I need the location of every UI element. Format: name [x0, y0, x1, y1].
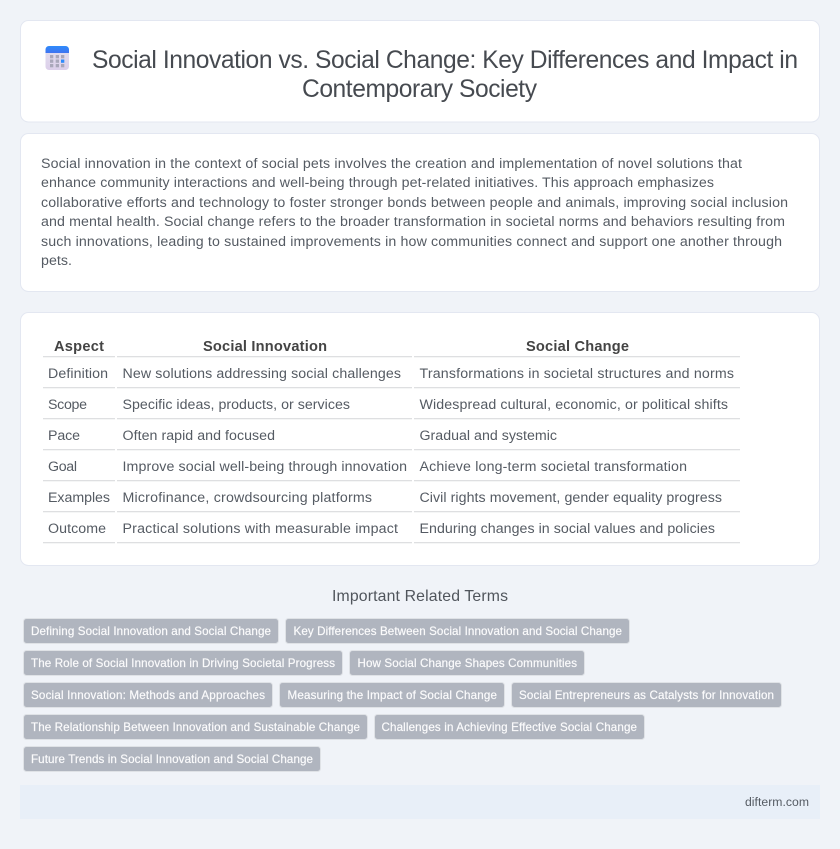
tag: measuring the impact: Measuring the Impact of Social Change: [288, 689, 497, 702]
table row: scope: Widespread cultural, economic, or political shifts: [420, 397, 728, 413]
tag: methods and approaches: Social Innovation: Methods and Approaches: [31, 689, 265, 702]
title: [92, 47, 798, 103]
table row: outcome: Outcome: [48, 521, 106, 537]
table row: definition: [48, 366, 734, 382]
table header row: [54, 339, 629, 355]
table header row: Aspect: [54, 339, 104, 355]
table row: goal: Achieve long-term societal transformation: [420, 459, 687, 475]
tag: role of social innovation: [24, 650, 342, 676]
table row: examples: Civil rights movement, gender equality progress: [420, 490, 722, 506]
table row: outcome: Enduring changes in social values and policies: [420, 521, 715, 537]
table row: pace: Pace: [48, 428, 80, 444]
table row: goal: Improve social well-being through innovation: [122, 459, 407, 475]
table row: scope: Scope: [48, 397, 87, 413]
heading: important related terms: Important Related Terms: [332, 588, 508, 605]
table row: outcome: [48, 521, 715, 537]
table row: pace: [48, 428, 557, 444]
tag: how social change shapes communities: [350, 650, 584, 676]
footer: site name: difterm.com: [745, 795, 809, 809]
text block: introduction paragraph: and mental health. Social change refers to the broader transformation in societal norms and behaviors resulting from: [41, 214, 785, 230]
footer: [20, 785, 820, 819]
table row: pace: Gradual and systemic: [420, 428, 557, 444]
table row: examples: [48, 490, 722, 506]
table header row: Social Innovation: [203, 339, 327, 355]
tag: how social change shapes communities: How Social Change Shapes Communities: [358, 657, 577, 670]
text block: introduction paragraph: collaborative efforts and technology to foster stronger bonds between people and animals, improving social inclusion: [41, 195, 788, 211]
table row: goal: Goal: [48, 459, 77, 475]
panel: introduction: [20, 134, 820, 292]
table row: outcome: Practical solutions with measurable impact: [122, 521, 398, 537]
table header row: Social Change: [526, 339, 629, 355]
tag: methods and approaches: [24, 682, 272, 708]
title: Contemporary Society: [302, 76, 538, 103]
tag: future trends: [24, 746, 320, 772]
tag: challenges: [374, 714, 644, 740]
table row: definition: New solutions addressing social challenges: [122, 366, 401, 382]
tag: role of social innovation: The Role of Social Innovation in Driving Societal Progress: [31, 657, 335, 670]
tag: challenges: Challenges in Achieving Effective Social Change: [382, 721, 637, 734]
table row: definition: Definition: [48, 366, 108, 382]
table row: goal: [48, 459, 687, 475]
panel: header: [20, 20, 820, 122]
table row: pace: Often rapid and focused: [122, 428, 275, 444]
table row: definition: Transformations in societal structures and norms: [420, 366, 734, 382]
tag: relationship between innovation and sustainable change: The Relationship Between Innovation and Sustainable Change: [31, 721, 360, 734]
tag: future trends: Future Trends in Social Innovation and Social Change: [31, 753, 313, 766]
tag: key differences: [286, 618, 630, 644]
tag: key differences: Key Differences Between Social Innovation and Social Change: [294, 625, 622, 638]
table row: examples: Examples: [48, 490, 110, 506]
text block: introduction paragraph: Social innovation in the context of social pets involves the creation and implementation of novel solutions that: [41, 156, 742, 172]
tag: measuring the impact: [280, 682, 504, 708]
table row: scope: [48, 397, 728, 413]
related terms tags: [24, 618, 782, 772]
tag: relationship between innovation and sustainable change: [24, 714, 368, 740]
tag: defining: [24, 618, 278, 644]
text block: introduction paragraph: pets.: [41, 253, 72, 269]
tag: defining: Defining Social Innovation and Social Change: [31, 625, 271, 638]
table row: examples: Microfinance, crowdsourcing platforms: [122, 490, 372, 506]
tag: social entrepreneurs: [512, 682, 782, 708]
icon: calendar: [46, 46, 69, 70]
panel: comparison table: [20, 312, 820, 566]
table row: scope: Specific ideas, products, or services: [122, 397, 350, 413]
text block: introduction paragraph: [41, 156, 788, 269]
tag: social entrepreneurs: Social Entrepreneurs as Catalysts for Innovation: [519, 689, 774, 702]
title: Social Innovation vs. Social Change: Key Differences and Impact in: [92, 47, 798, 74]
text block: introduction paragraph: such innovations, leading to sustained improvements in how communities connect and support one another through: [41, 234, 782, 250]
text block: introduction paragraph: enhance community interactions and well-being through pet-related initiatives. This approach emphasizes: [41, 175, 714, 191]
